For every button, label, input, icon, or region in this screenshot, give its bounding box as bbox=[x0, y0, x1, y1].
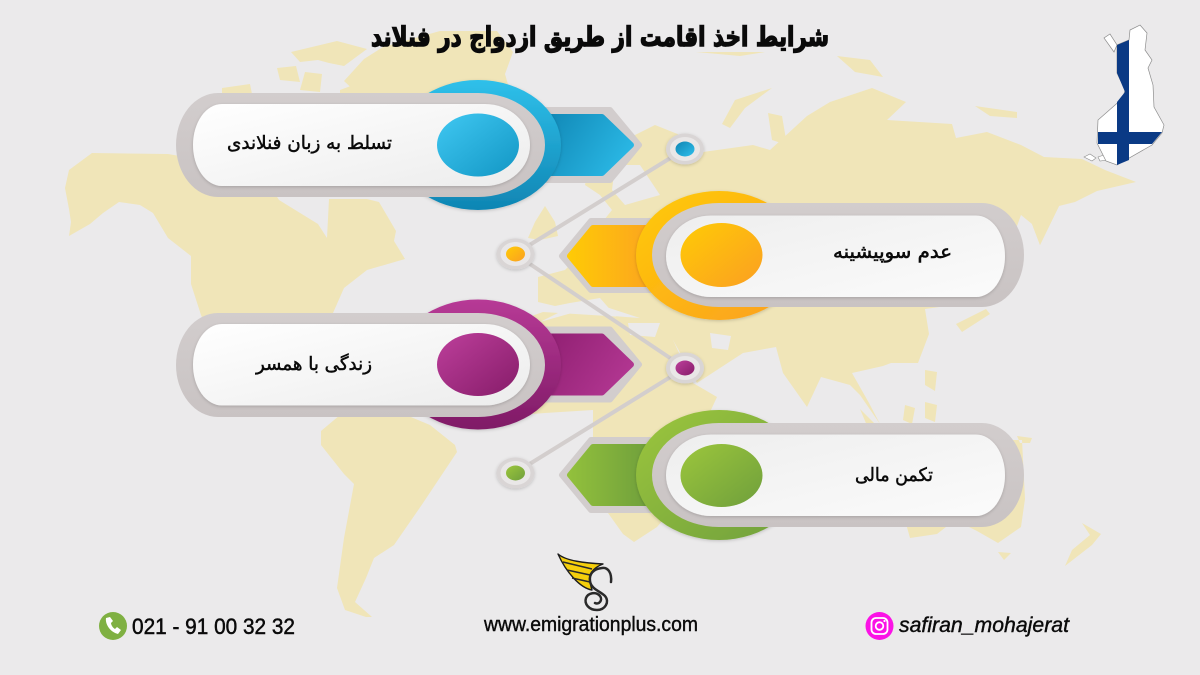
connector dot: blue bbox=[666, 134, 704, 164]
yellow coin bbox=[680, 223, 762, 287]
connector dot: green bbox=[496, 458, 534, 488]
white pill bbox=[193, 104, 530, 186]
title: شرایط اخذ اقامت از طریق ازدواج در فنلاند bbox=[371, 22, 829, 53]
connector dot: magenta bbox=[666, 352, 704, 384]
magenta arrow tab bbox=[530, 330, 639, 400]
map: New Zealand and Tasmania bbox=[998, 523, 1101, 566]
map: Japan and Philippines bbox=[925, 206, 1059, 391]
map: British Isles bbox=[528, 206, 558, 240]
label: زندگی با همسر bbox=[255, 353, 372, 375]
Lake islands bbox=[1084, 154, 1107, 161]
phone number: 021 - 91 00 32 32 bbox=[132, 614, 295, 639]
magenta ring bbox=[395, 300, 561, 430]
blue arrow tab bbox=[530, 110, 639, 180]
map: Indonesia bbox=[860, 402, 937, 430]
flag cross bbox=[1098, 40, 1162, 165]
S swirl bbox=[586, 568, 611, 610]
white pill bbox=[666, 434, 1005, 516]
green coin bbox=[680, 444, 762, 507]
grey pill frame bbox=[176, 93, 545, 197]
map: northern islands bbox=[696, 52, 1017, 145]
grey pill frame bbox=[176, 313, 545, 417]
panel: green card bbox=[562, 410, 1024, 540]
blue ring bbox=[395, 80, 561, 210]
label: عدم سوپیشینه bbox=[833, 242, 952, 263]
grey pill frame bbox=[652, 203, 1024, 307]
green arrow tab bbox=[562, 440, 650, 510]
map: Arctic islands bbox=[222, 41, 367, 96]
connector dot: yellow bbox=[496, 238, 534, 270]
wing bbox=[558, 554, 603, 590]
white pill bbox=[193, 324, 530, 406]
icon: phone bbox=[99, 612, 127, 640]
instagram handle: safiran_mohajerat bbox=[899, 614, 1070, 637]
yellow arrow tab bbox=[562, 221, 650, 290]
Finland shape bbox=[1097, 25, 1164, 165]
panel: blue card bbox=[176, 80, 639, 210]
logo: winged S bbox=[558, 554, 611, 610]
map: Africa bbox=[470, 312, 717, 542]
white pill bbox=[666, 216, 1005, 297]
map: South America bbox=[321, 415, 457, 617]
map: Eurasia bbox=[538, 88, 1136, 424]
website: www.emigrationplus.com bbox=[483, 614, 698, 636]
panel: yellow card bbox=[562, 191, 1024, 320]
map of Finland with flag bbox=[1084, 25, 1164, 165]
map: Australia bbox=[905, 436, 1032, 543]
contact: phone bbox=[99, 612, 295, 640]
green ring bbox=[636, 410, 802, 540]
grey pill frame bbox=[652, 423, 1024, 527]
map: inland seas bbox=[540, 165, 731, 350]
wing feathers bbox=[563, 562, 592, 582]
blue coin bbox=[437, 114, 519, 176]
label: تسلط به زبان فنلاندی bbox=[227, 133, 392, 154]
label: تکمن مالی bbox=[855, 465, 933, 486]
map: Greenland bbox=[344, 31, 513, 110]
world map bbox=[65, 31, 1136, 617]
map: North America bbox=[65, 153, 405, 400]
magenta coin bbox=[437, 333, 519, 396]
connector lines bbox=[515, 149, 685, 473]
panel: magenta card bbox=[176, 300, 639, 430]
yellow ring bbox=[636, 191, 802, 320]
contact: instagram bbox=[866, 612, 1070, 640]
icon: instagram bbox=[866, 612, 894, 640]
